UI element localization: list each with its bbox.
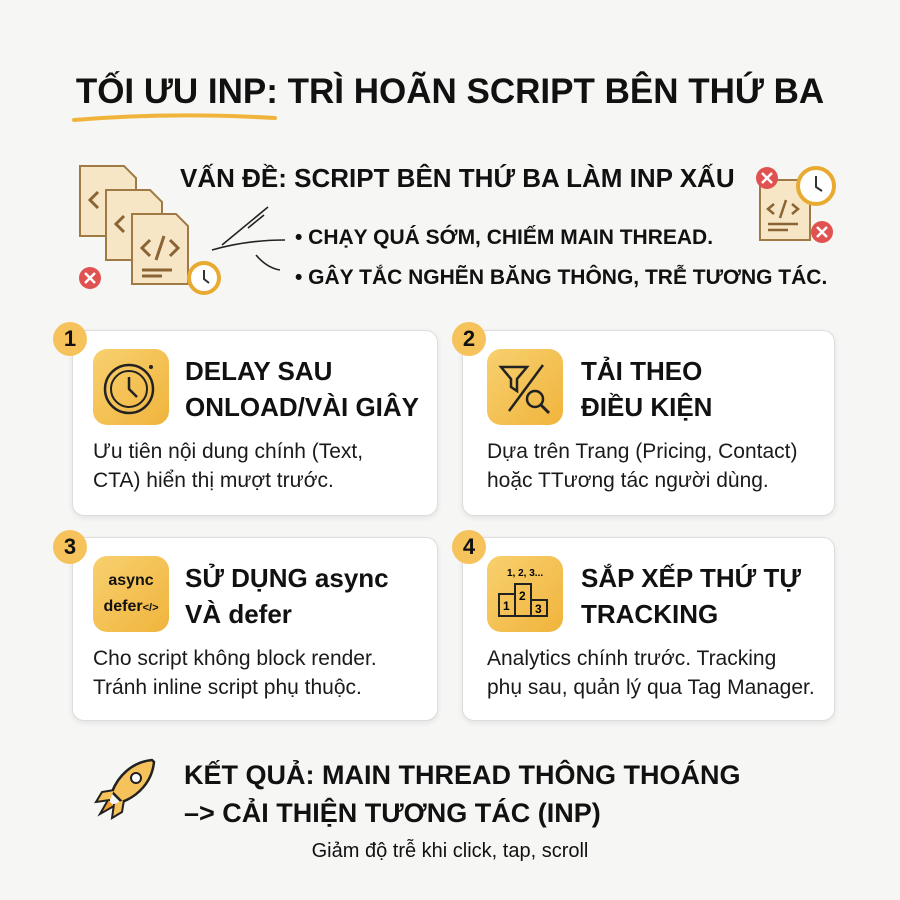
heading 3: VÀ defer: [185, 599, 292, 629]
heading 1: ONLOAD/VÀI GIÂY: [185, 392, 419, 422]
badge 4: [452, 530, 486, 564]
heading 4: [581, 563, 801, 629]
title: TỐI ƯU INP: TRÌ HOÃN SCRIPT BÊN THỨ BA: [76, 72, 824, 111]
heading 2: ĐIỀU KIỆN: [581, 392, 712, 422]
heading 4: TRACKING: [581, 599, 718, 629]
result heading: –> CẢI THIỆN TƯƠNG TÁC (INP): [184, 798, 601, 828]
heading 2: TẢI THEO: [581, 356, 702, 386]
problem heading: VẤN ĐỀ: SCRIPT BÊN THỨ BA LÀM INP XẤU: [180, 163, 735, 193]
icon: async defer: defer</>: [103, 598, 159, 615]
body 2: [487, 440, 798, 492]
icon: async defer: [93, 556, 169, 632]
heading 1: DELAY SAU: [185, 356, 332, 386]
body 4: Analytics chính trước. Tracking: [487, 647, 776, 670]
body 1: Ưu tiên nội dung chính (Text,: [93, 440, 363, 463]
icon: clock: [93, 349, 169, 425]
result heading: [184, 760, 740, 828]
icon: podium: [487, 556, 563, 632]
body 4: [487, 647, 815, 699]
icon: podium: 3: [535, 602, 542, 616]
card 2: [462, 330, 835, 516]
bullets: [295, 224, 827, 289]
body 3: Cho script không block render.: [93, 647, 377, 670]
badge 1: 1: [64, 326, 76, 351]
body 4: phụ sau, quản lý qua Tag Manager.: [487, 676, 815, 699]
heading 3: [185, 563, 389, 629]
badge 2: 2: [463, 326, 475, 351]
bullets: • GÂY TẮC NGHẼN BĂNG THÔNG, TRỄ TƯƠNG TÁC.: [295, 266, 827, 289]
icon: async defer: async: [108, 572, 154, 589]
badge 3: [53, 530, 87, 564]
title underline: [72, 113, 277, 122]
badge 1: [53, 322, 87, 356]
card 3: [72, 537, 438, 721]
result heading: KẾT QUẢ: MAIN THREAD THÔNG THOÁNG: [184, 760, 740, 790]
body 3: Tránh inline script phụ thuộc.: [93, 676, 362, 699]
card 1: [72, 330, 438, 516]
icon: podium: 2: [519, 589, 526, 603]
heading 4: SẮP XẾP THỨ TỰ: [581, 563, 801, 593]
bullets: • CHẠY QUÁ SỚM, CHIẾM MAIN THREAD.: [295, 226, 713, 249]
body 2: hoặc TTương tác người dùng.: [487, 469, 769, 492]
heading 3: SỬ DỤNG async: [185, 563, 389, 593]
badge 2: [452, 322, 486, 356]
icon: script with clock and error: [756, 166, 836, 243]
heading 2: [581, 356, 712, 422]
icon: rocket: [94, 758, 156, 820]
body 2: Dựa trên Trang (Pricing, Contact): [487, 440, 798, 463]
badge 3: 3: [64, 534, 76, 559]
heading 1: [185, 356, 419, 422]
body 3: [93, 647, 377, 699]
card 4: [462, 537, 835, 721]
result subtitle: Giảm độ trễ khi click, tap, scroll: [312, 840, 588, 862]
icon: filter: [487, 349, 563, 425]
badge 4: 4: [463, 534, 475, 559]
icon: podium: 1: [503, 599, 510, 613]
icon: script files: [79, 165, 285, 295]
body 1: CTA) hiển thị mượt trước.: [93, 469, 334, 492]
body 1: [93, 440, 363, 492]
icon: podium: 1, 2, 3...: [507, 568, 543, 579]
